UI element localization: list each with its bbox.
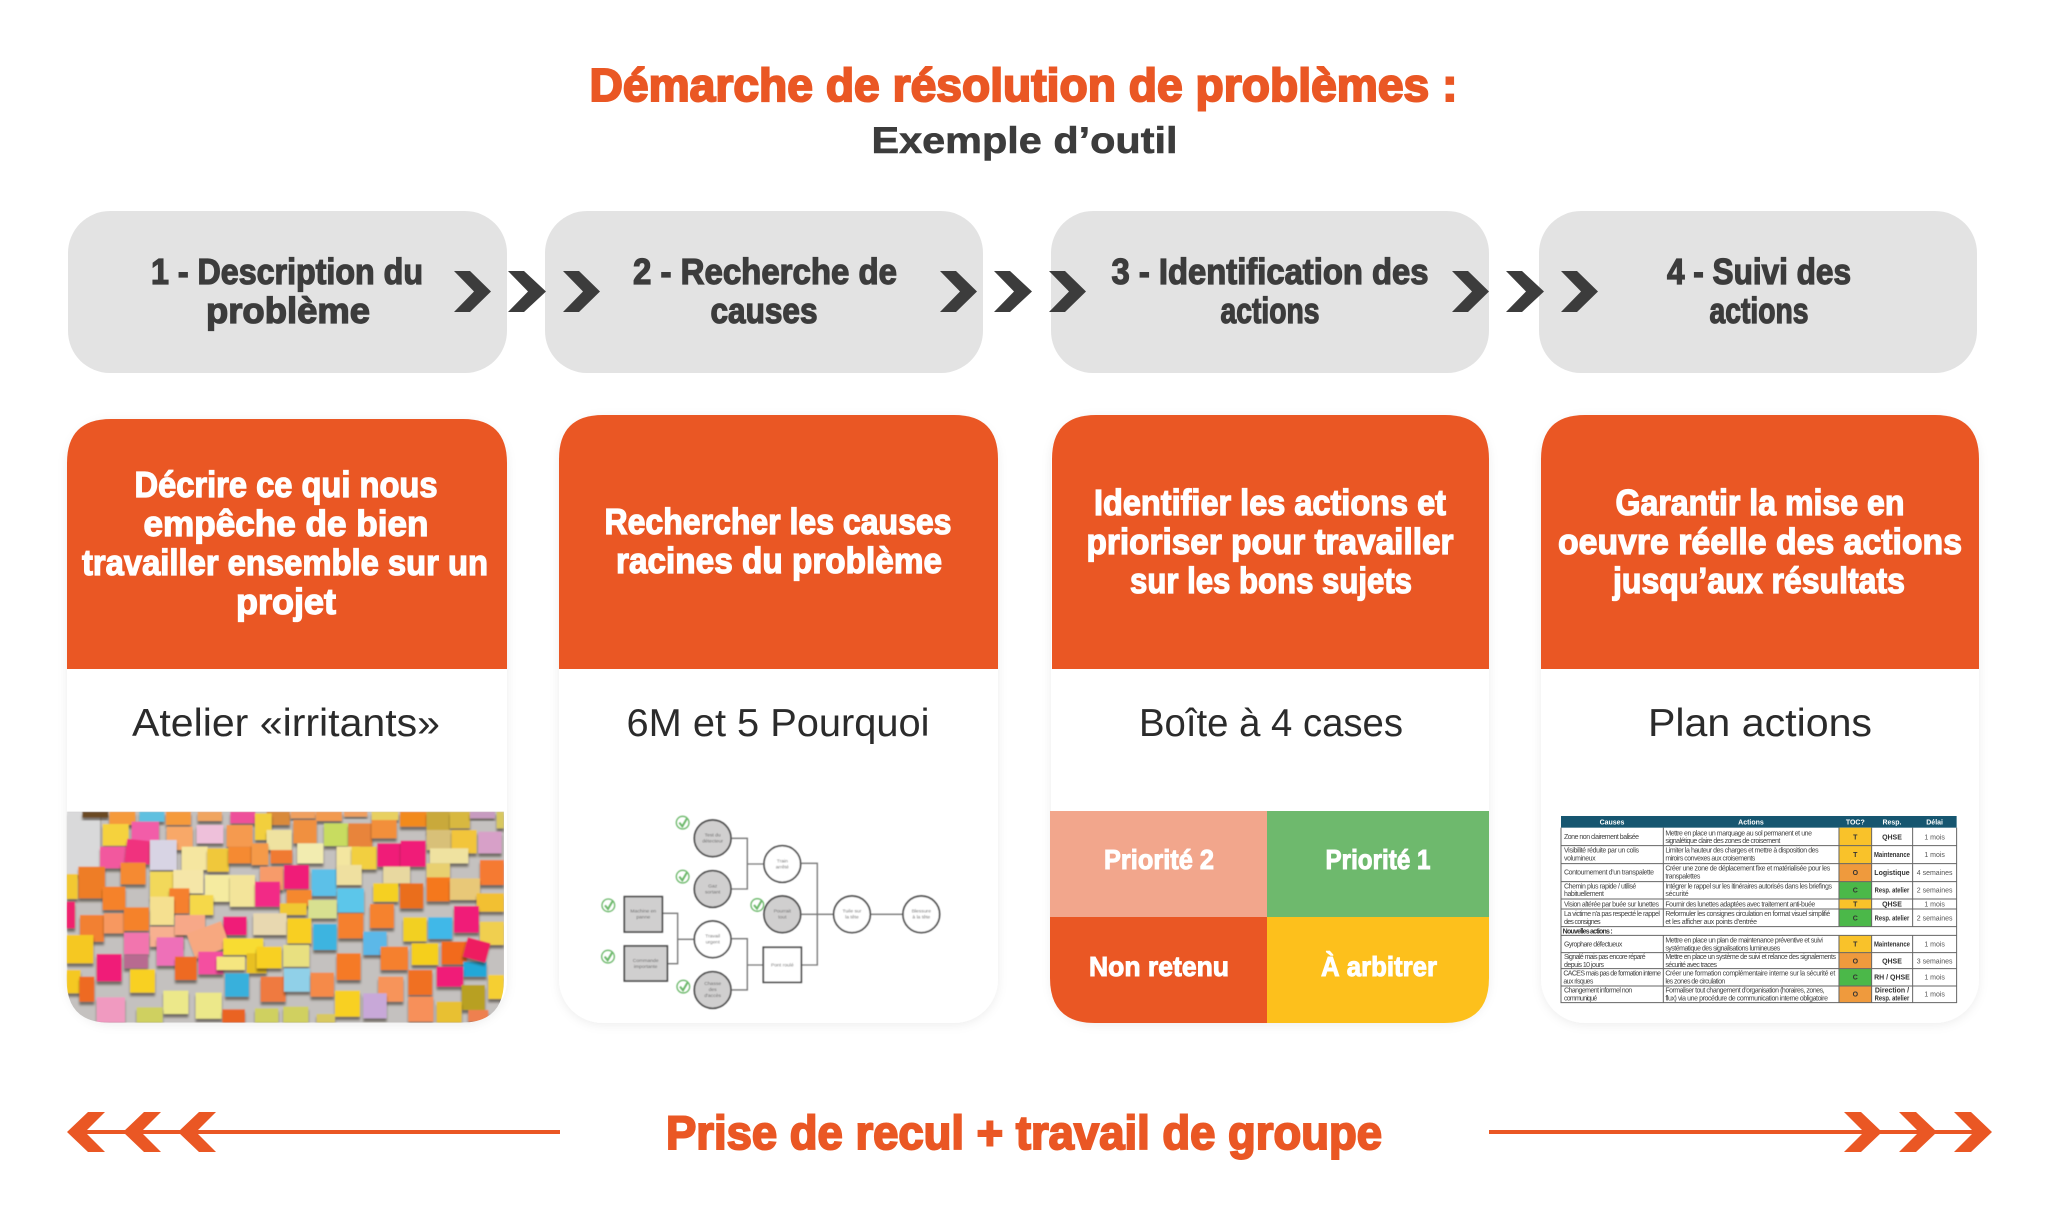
action plan table: aux risques: [1563, 979, 1594, 986]
arrow: right chevrons and line: [1489, 1112, 1992, 1152]
tool name: Atelier «irritants»: [132, 702, 440, 745]
action plan table: habituellement: [1564, 891, 1604, 898]
panel: atelier irritants: [67, 419, 507, 1024]
action plan table: 2 semaines: [1917, 888, 1953, 895]
title: [590, 59, 1458, 161]
diagram: fault tree: tout: [778, 915, 787, 921]
header text: Rechercher les causes: [604, 501, 952, 542]
step 3: identification des actions: [1051, 211, 1489, 373]
diagram: fault tree: panne: [636, 915, 650, 921]
header text: empêche de bien: [144, 503, 428, 544]
action plan table: des consignes: [1564, 919, 1601, 926]
panel: 6M et 5 Pourquoi: [559, 415, 998, 1023]
action plan table: O: [1853, 870, 1859, 877]
header text: Décrire ce qui nous: [134, 464, 438, 505]
step 3: identification des actions: 3 - Identification des: [1112, 251, 1428, 292]
matrix: à arbitrer: À arbitrer: [1321, 951, 1437, 982]
matrix: non retenu: Non retenu: [1089, 951, 1229, 982]
header text: travailler ensemble sur un: [82, 542, 488, 583]
action plan table: QHSE: [1882, 834, 1902, 841]
step 3: identification des actions: actions: [1220, 290, 1320, 331]
orange header: [67, 419, 507, 669]
diagram: fault tree: urgent: [706, 940, 720, 946]
action plan table: La victime n’a pas respecté le rappel: [1564, 911, 1660, 918]
action plan table: [1561, 816, 1957, 1003]
action plan table: T: [1853, 941, 1858, 948]
diagram: fault tree: la tête: [845, 915, 859, 921]
action plan table: T: [1853, 901, 1858, 908]
diagram: fault tree: à la tête: [912, 915, 930, 921]
step 1: description du problème: [68, 211, 507, 373]
matrix: priorité 1: Priorité 1: [1326, 844, 1430, 875]
subtitle: Exemple d’outil: [872, 120, 1178, 161]
diagram: fault tree: arrêté: [776, 864, 789, 870]
action plan table: Formaliser tout changement d’organisation (horaires, zones,: [1665, 988, 1825, 995]
action plan table: 1 mois: [1924, 975, 1945, 982]
action plan table: Logistique: [1874, 870, 1910, 877]
action plan table: RH / QHSE: [1874, 975, 1910, 982]
diagram: fault tree: Test du: [705, 833, 721, 839]
action plan table: signalétique claire des zones de croisement: [1665, 838, 1780, 845]
action plan table: Visibilité réduite par un colis: [1564, 848, 1639, 855]
arrows: chevrons between steps 1 and 2: [454, 271, 600, 312]
action plan table: C: [1853, 915, 1858, 922]
diagram: fault tree: Travail: [705, 934, 720, 940]
action plan table: volumineux: [1564, 856, 1596, 863]
action plan table: Limiter la hauteur des charges et mettre à disposition des: [1665, 848, 1819, 855]
diagram: fault tree: d'accès: [704, 993, 722, 999]
action plan table: depuis 10 jours: [1564, 962, 1604, 969]
action plan table: QHSE: [1882, 958, 1902, 965]
action plan table: Actions: [1738, 819, 1764, 826]
action plan table: miroirs convexes aux croisements: [1665, 855, 1756, 862]
header text: [1086, 482, 1454, 601]
action plan table: et les afficher aux points d’entrée: [1665, 919, 1757, 926]
main heading: Démarche de résolution de problèmes :: [590, 59, 1458, 111]
action plan table: systématique des signalisations lumineuses: [1665, 945, 1781, 952]
action plan table: Gyrophare défectueux: [1564, 941, 1623, 948]
action plan table: Délai: [1926, 819, 1943, 826]
action plan table: Contournement d’un transpalette: [1564, 870, 1654, 877]
diagram: fault tree: Pourrait: [774, 909, 792, 915]
diagram: fault tree: [602, 816, 940, 1008]
diagram: fault tree: Chasse: [704, 981, 721, 987]
action plan table: Créer une zone de déplacement fixe et matérialisée pour les: [1665, 866, 1831, 873]
tool name: Boîte à 4 cases: [1139, 702, 1403, 745]
action plan table: CACES mais pas de formation interne: [1563, 971, 1661, 978]
header text: [604, 501, 952, 581]
action plan table: Resp. atelier: [1875, 888, 1910, 895]
action plan table: Fournir des lunettes adaptées avec traitement anti-buée: [1665, 901, 1815, 908]
arrows: chevrons between steps 3 and 4: [1452, 271, 1598, 312]
diagram: fault tree: détecteur: [702, 839, 723, 845]
action plan table: Signalé mais pas encore réparé: [1564, 954, 1646, 961]
action plan table: O: [1853, 958, 1859, 965]
action plan table: 4 semaines: [1917, 870, 1953, 877]
action plan table: C: [1853, 888, 1858, 895]
action plan table: Mettre en place un marquage au sol permanent et une: [1665, 830, 1812, 837]
action plan table: 1 mois: [1924, 834, 1945, 841]
diagram: fault tree: des: [709, 987, 717, 993]
matrix: priorité 2: Priorité 2: [1104, 844, 1214, 875]
diagram: fault tree: importante: [634, 964, 658, 970]
action plan table: Nouvelles actions :: [1563, 928, 1613, 935]
action plan table: communiqué: [1564, 995, 1597, 1002]
arrow: left chevrons and line: [67, 1112, 560, 1152]
header text: sur les bons sujets: [1130, 560, 1412, 601]
header text: [1558, 482, 1962, 601]
diagram: fault tree: Commande: [633, 958, 659, 964]
diagram: fault tree: Blessure: [912, 909, 931, 915]
header text: prioriser pour travailler: [1086, 521, 1454, 562]
matrix: non retenu: [1050, 917, 1267, 1023]
orange header: [1052, 415, 1489, 669]
action plan table: Mettre en place un plan de maintenance préventive et suivi: [1665, 937, 1823, 944]
orange header: [1541, 415, 1979, 669]
step 2: recherche de causes: 2 - Recherche de: [633, 251, 897, 292]
action plan table: Maintenance: [1874, 852, 1910, 859]
action plan table: Mettre en place un système de suivi et relance des signalements: [1665, 954, 1836, 961]
tool name: 6M et 5 Pourquoi: [626, 702, 930, 745]
diagram: fault tree: Tuile sur: [843, 909, 862, 915]
action plan table: C: [1853, 975, 1858, 982]
action plan table: 1 mois: [1924, 941, 1945, 948]
header text: oeuvre réelle des actions: [1558, 521, 1962, 562]
action plan table: T: [1853, 834, 1858, 841]
action plan table: Créer une formation complémentaire interne sur la sécurité et: [1665, 971, 1835, 978]
action plan table: les zones de circulation: [1665, 979, 1725, 986]
action plan table: 1 mois: [1924, 901, 1945, 908]
matrix: priorité 2: [1050, 811, 1267, 917]
action plan table: transpalettes: [1665, 874, 1701, 881]
action plan table: Resp.: [1882, 819, 1902, 826]
diagram: fault tree: Machine en: [630, 909, 656, 915]
step 1: description du problème: 1 - Description du: [151, 251, 423, 292]
action plan table: O: [1853, 992, 1859, 999]
action plan table: Vision altérée par buée sur lunettes: [1564, 901, 1659, 908]
action plan table: Zone non clairement balisée: [1564, 834, 1639, 841]
action plan table: Changement informel non: [1564, 988, 1632, 995]
action plan table: QHSE: [1882, 901, 1902, 908]
header text: projet: [236, 581, 336, 622]
step 4: suivi des actions: [1539, 211, 1977, 373]
step 2: recherche de causes: causes: [710, 290, 818, 331]
action plan table: 2 semaines: [1917, 915, 1953, 922]
tool name: Plan actions: [1648, 702, 1872, 745]
matrix: priorité 1: [1267, 811, 1489, 917]
matrix: à arbitrer: [1267, 917, 1489, 1023]
action plan table: Direction /: [1875, 988, 1909, 995]
step 1: description du problème: problème: [206, 290, 370, 331]
action plan table: Reformuler les consignes circulation en format visuel simplifié: [1665, 911, 1830, 918]
header text: Garantir la mise en: [1616, 482, 1904, 523]
action plan table: Maintenance: [1874, 941, 1910, 948]
diagram: fault tree: Pont roulé: [771, 963, 794, 969]
action plan table: Chemin plus rapide / utilisé: [1564, 883, 1636, 890]
step 4: suivi des actions: actions: [1710, 290, 1808, 331]
header text: jusqu’aux résultats: [1612, 560, 1905, 601]
diagram: fault tree: Gaz: [708, 883, 718, 889]
photo: sticky notes wall: [67, 811, 505, 1024]
panel: plan actions: [1541, 415, 1979, 1023]
action plan table: sécurité: [1665, 891, 1689, 898]
action plan table: flux) via une procédure de communication interne obligatoire: [1665, 995, 1828, 1002]
action plan table: Resp. atelier: [1875, 995, 1910, 1002]
header text: [82, 464, 488, 622]
step 4: suivi des actions: 4 - Suivi des: [1667, 251, 1851, 292]
diagram: fault tree: sortant: [705, 889, 721, 895]
step 2: recherche de causes: [545, 211, 983, 373]
orange header: [559, 415, 998, 669]
action plan table: 1 mois: [1924, 852, 1945, 859]
action plan table: T: [1853, 852, 1858, 859]
action plan table: 3 semaines: [1917, 958, 1953, 965]
diagram: fault tree: Train: [777, 858, 788, 864]
action plan table: Resp. atelier: [1875, 915, 1910, 922]
arrows: chevrons between steps 2 and 3: [940, 271, 1086, 312]
action plan table: TOC?: [1846, 819, 1865, 826]
header text: racines du problème: [616, 540, 942, 581]
header text: Identifier les actions et: [1094, 482, 1446, 523]
action plan table: Intégrer le rappel sur les itinéraires autorisés dans les briefings: [1665, 883, 1832, 890]
footer message: Prise de recul + travail de groupe: [666, 1106, 1382, 1159]
panel: boîte à 4 cases: [1050, 415, 1489, 1023]
action plan table: 1 mois: [1924, 992, 1945, 999]
action plan table: sécurité avec traces: [1665, 962, 1717, 969]
action plan table: Causes: [1600, 819, 1625, 826]
